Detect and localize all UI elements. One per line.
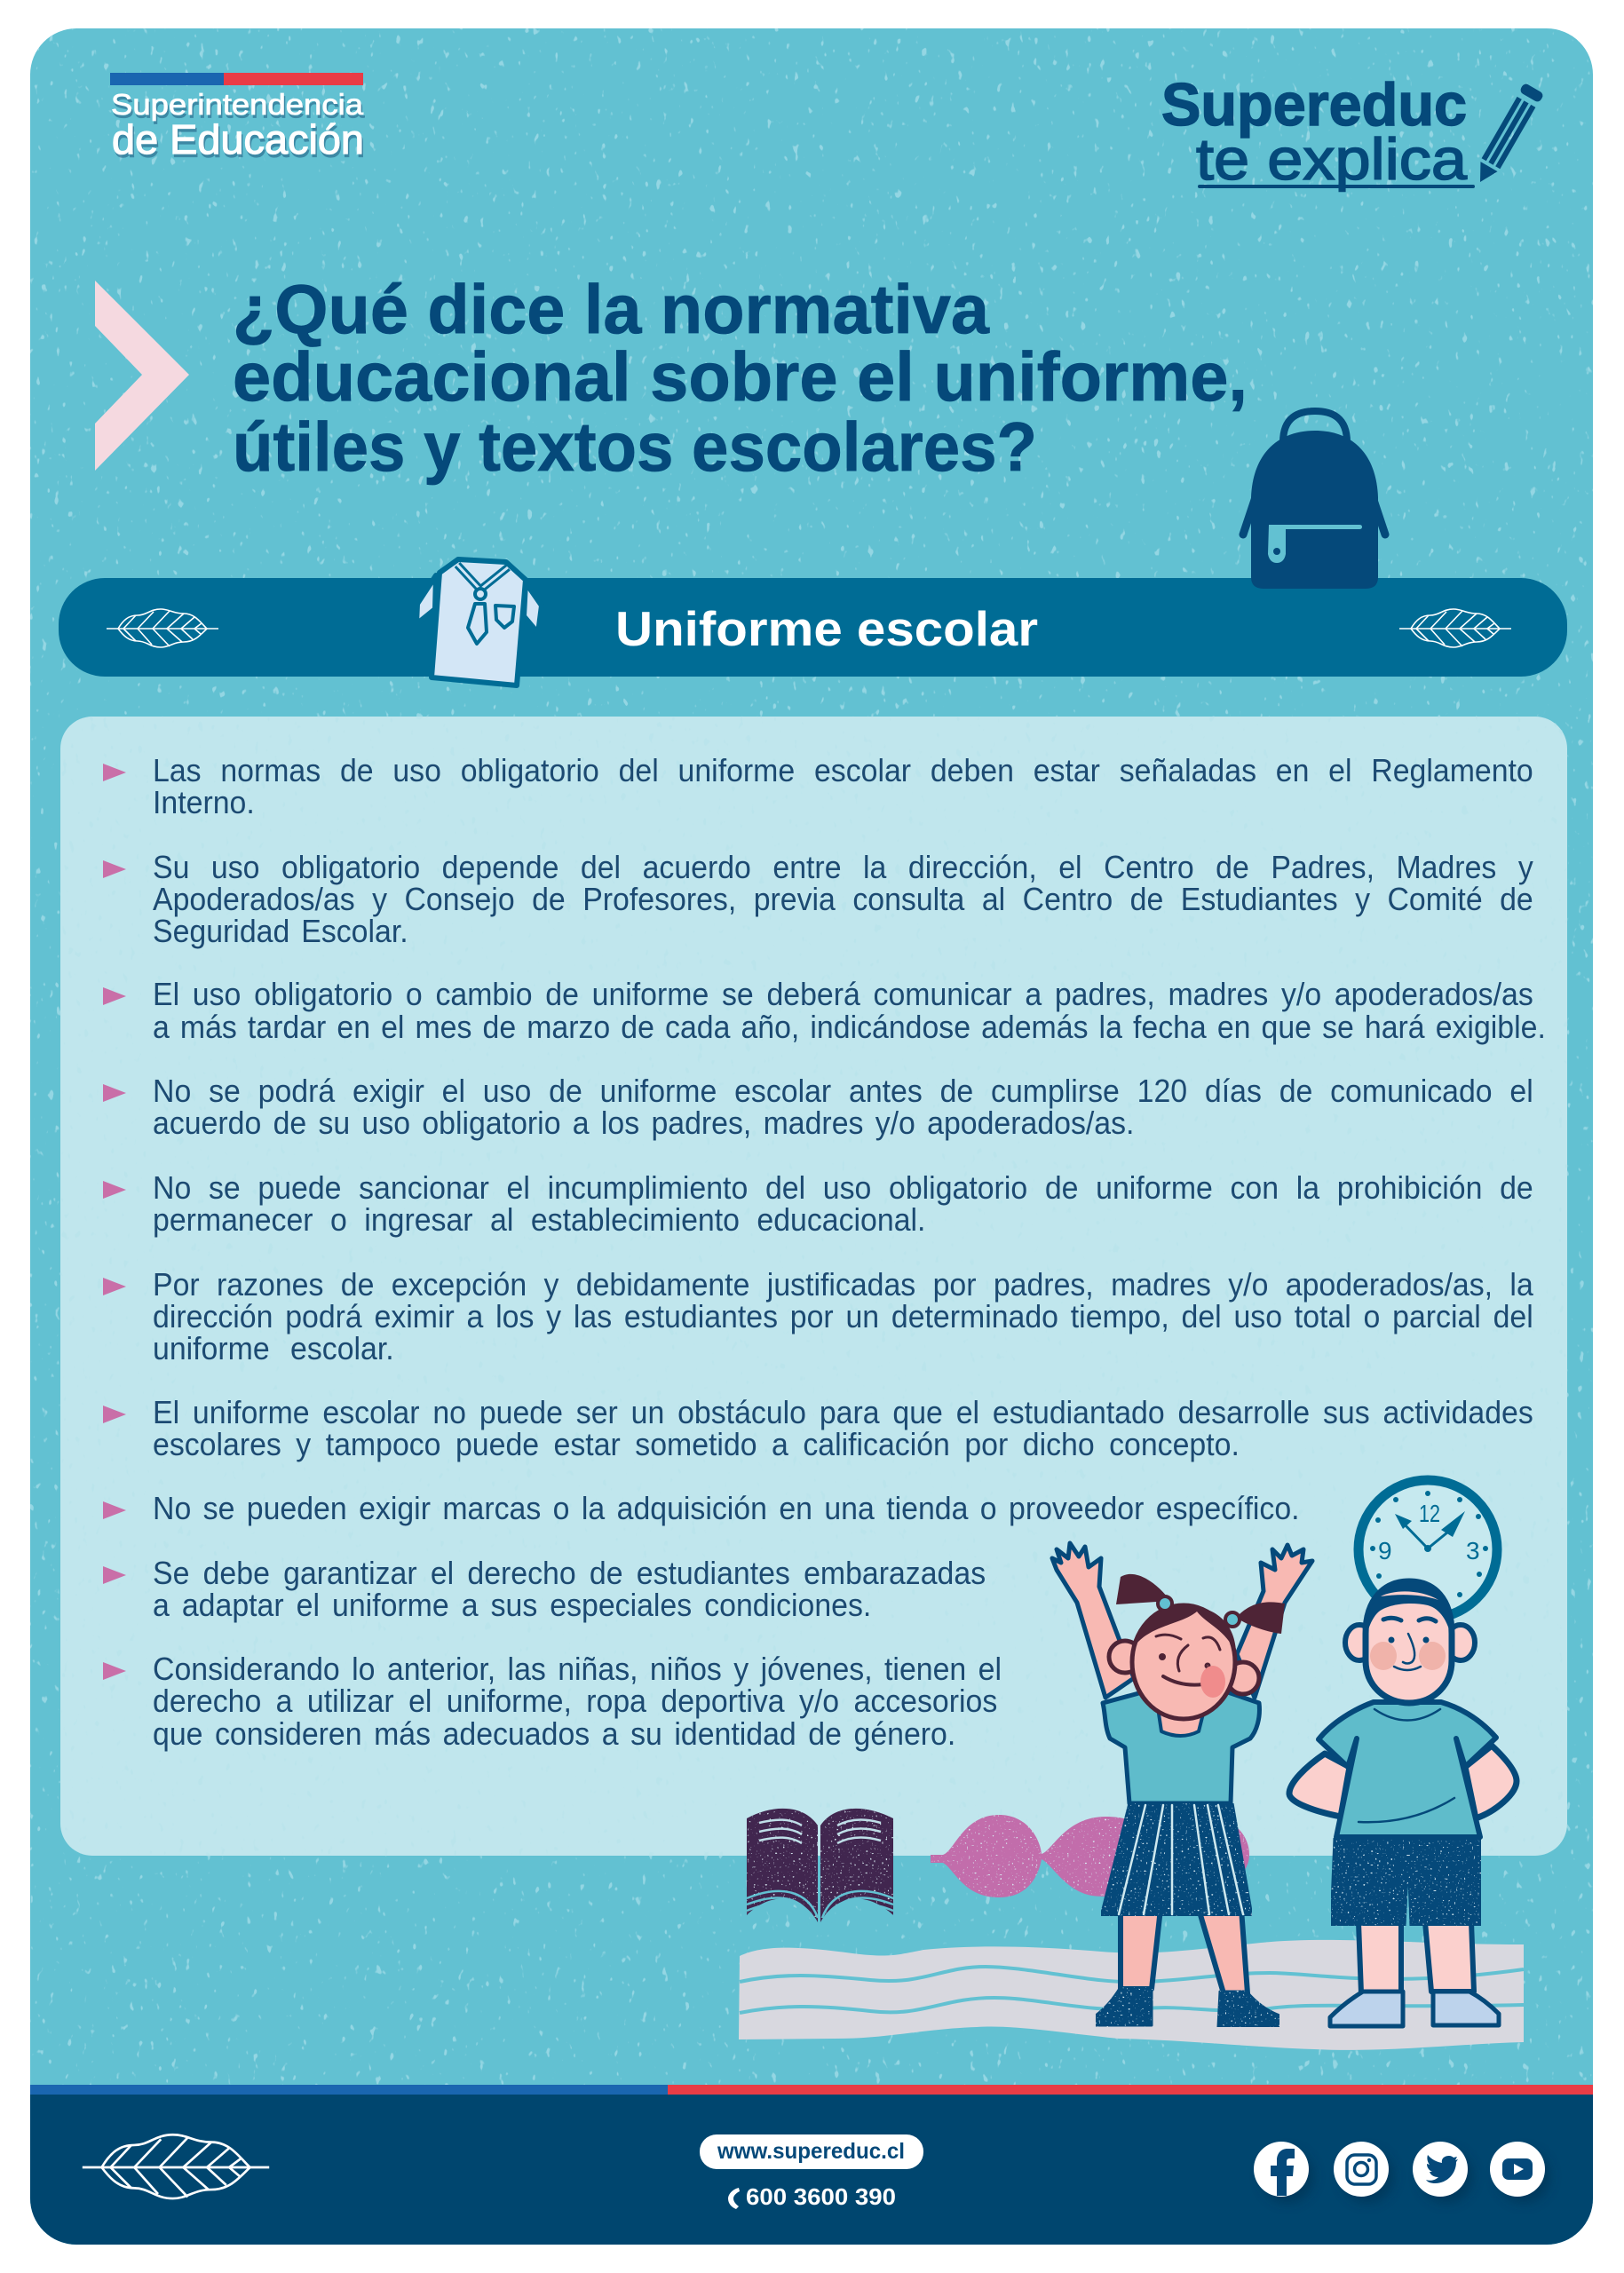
logo: Superintendencia de Educación: Superintendencia <box>112 91 365 124</box>
girl pigtails <box>1116 1574 1170 1604</box>
girl hair <box>1134 1607 1236 1653</box>
rule 6: uniforme escolar. <box>153 1330 394 1366</box>
girl shoes <box>1096 1987 1279 2027</box>
icon: footer leaf <box>83 2134 269 2198</box>
phone number: 600 3600 390 <box>746 2183 896 2210</box>
rule 3: El uso obligatorio o cambio de uniforme se deberá comunicar a padres, madres y/o apoderados/as <box>153 976 1533 1012</box>
girl head <box>1132 1605 1235 1719</box>
rule 6: Por razones de excepción y debidamente justificadas por padres, madres y/o apoderados/as, la <box>153 1266 1533 1303</box>
panel: rules <box>60 717 1567 1856</box>
boy shorts <box>1331 1838 1481 1926</box>
rule 4: No se podrá exigir el uso de uniforme escolar antes de cumplirse 120 días de comunicado el <box>153 1073 1533 1109</box>
logo: Superintendencia de Educación: Superintendencia <box>111 88 364 121</box>
illustration: clock: 12 <box>1419 1500 1440 1527</box>
illustration: open book <box>747 1809 893 1922</box>
rule 9 <box>103 1555 986 1623</box>
girl legs <box>1121 1909 1248 1993</box>
rule 5 <box>103 1169 1533 1238</box>
title: educacional sobre el uniforme, <box>233 337 1248 416</box>
illustration: boy <box>1289 1581 1517 2026</box>
boy shoes <box>1330 1992 1499 2026</box>
rule 2: Apoderados/as y Consejo de Profesores, previa consulta al Centro de Estudiantes y Comité de <box>153 881 1533 917</box>
logo: Superintendencia de Educación: de Educación <box>112 116 364 162</box>
boy legs <box>1359 1922 1474 1993</box>
banner heading: Uniforme escolar <box>615 601 1038 656</box>
rule 8: No se pueden exigir marcas o la adquisición en una tienda o proveedor específico. <box>153 1490 1300 1526</box>
icon: leaf right <box>1399 609 1511 647</box>
icon: instagram <box>1334 2142 1389 2197</box>
title: ¿Qué dice la normativa <box>233 270 990 348</box>
rule 9: Se debe garantizar el derecho de estudiantes embarazadas <box>153 1555 986 1591</box>
website pill <box>700 2134 923 2169</box>
rule 10 <box>103 1651 1002 1752</box>
boy t-shirt <box>1319 1702 1496 1837</box>
rule 1: Interno. <box>153 784 255 820</box>
rule 2: Seguridad Escolar. <box>153 913 408 949</box>
rule 7: El uniforme escolar no puede ser un obstáculo para que el estudiantado desarrolle sus actividades <box>153 1394 1533 1430</box>
rule 5: No se puede sancionar el incumplimiento del uso obligatorio de uniforme con la prohibición de <box>153 1169 1533 1206</box>
boy arms <box>1289 1754 1350 1817</box>
website pill: www.supereduc.cl <box>717 2139 905 2164</box>
rule 10: que consideren más adecuados a su identidad de género. <box>153 1715 955 1752</box>
rule 1: Las normas de uso obligatorio del uniforme escolar deben estar señaladas en el Reglamento <box>153 752 1533 788</box>
rule 7 <box>103 1394 1533 1462</box>
icon: pencil <box>1470 83 1544 188</box>
rule 1 <box>103 752 1533 820</box>
girl skirt <box>1101 1803 1252 1916</box>
icon: shirt <box>416 559 542 685</box>
logo: Superintendencia de Educación <box>110 73 366 165</box>
logo: Supereduc te explica: Supereduc <box>1161 71 1467 139</box>
rule 4: acuerdo de su uso obligatorio a los padres, madres y/o apoderados/as. <box>153 1105 1134 1141</box>
boy face <box>1370 1642 1397 1670</box>
rule 2 <box>103 849 1533 949</box>
logo: Supereduc te explica: te explica <box>1196 126 1467 192</box>
rule 10: Considerando lo anterior, las niñas, niños y jóvenes, tienen el <box>153 1651 1002 1687</box>
girl neck <box>1159 1714 1203 1736</box>
rule 3: a más tardar en el mes de marzo de cada año, indicándose además la fecha en que se hará exigible. <box>153 1009 1546 1045</box>
illustration: clock: 9 <box>1378 1537 1392 1564</box>
rule 3 <box>103 976 1546 1045</box>
rule 10: derecho a utilizar el uniforme, ropa deportiva y/o accesorios <box>153 1683 997 1719</box>
boy ears <box>1345 1625 1374 1660</box>
icon: facebook <box>1254 2142 1309 2197</box>
illustration: pink plant <box>931 1815 1249 1897</box>
girl shirt <box>1103 1691 1259 1803</box>
title <box>233 270 1248 486</box>
logo: Superintendencia de Educación: de Educación <box>114 119 366 165</box>
title: útiles y textos escolares? <box>233 408 1037 486</box>
illustration: wavy floor <box>739 1940 1524 2050</box>
boy head <box>1366 1581 1452 1703</box>
illustration: clock <box>1359 1480 1497 1619</box>
illustration: clock: 3 <box>1466 1537 1480 1564</box>
icon: twitter <box>1413 2142 1468 2197</box>
icon: youtube <box>1490 2142 1545 2197</box>
icon: leaf left <box>107 609 218 647</box>
section banner <box>59 578 1567 677</box>
boy shirt details <box>1359 1709 1454 1822</box>
rule 5: permanecer o ingresar al establecimiento educacional. <box>153 1201 925 1238</box>
girl face <box>1156 1635 1220 1685</box>
rule 2: Su uso obligatorio depende del acuerdo entre la dirección, el Centro de Padres, Madres y <box>153 849 1533 885</box>
rule 7: escolares y tampoco puede estar sometido a calificación por dicho concepto. <box>153 1426 1240 1462</box>
girl arms <box>1052 1543 1134 1698</box>
rule 9: a adaptar el uniforme a sus especiales condiciones. <box>153 1587 871 1623</box>
footer <box>30 2085 1593 2245</box>
rule 6: dirección podrá eximir a los y las estudiantes por un determinado tiempo, del uso total o parcial del <box>153 1298 1533 1334</box>
icon: backpack <box>1243 411 1385 589</box>
illustration: girl <box>1052 1543 1312 2027</box>
boy hair <box>1366 1581 1452 1643</box>
rule 6 <box>103 1266 1533 1366</box>
icon: pink chevron <box>95 281 189 471</box>
girl ears <box>1109 1641 1141 1673</box>
girl hair bands <box>1158 1596 1172 1611</box>
logo: Supereduc te explica <box>1161 71 1544 192</box>
rule 4 <box>103 1073 1533 1141</box>
social icons <box>1254 2142 1550 2203</box>
